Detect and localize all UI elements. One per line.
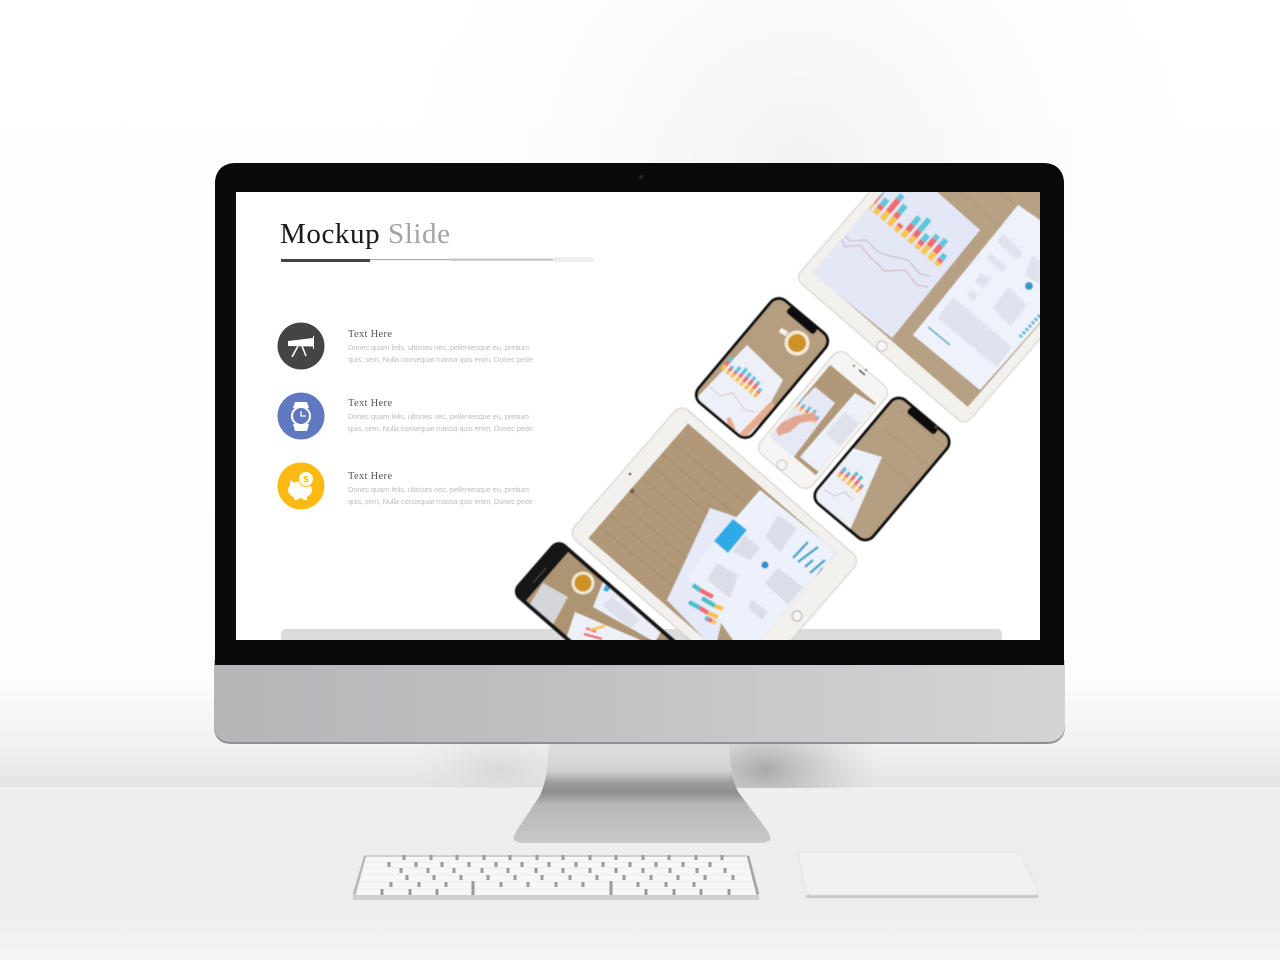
slide title: Mockup Slide [280,218,450,250]
small bars [584,628,602,639]
lower paper [565,612,645,642]
blue header block [714,519,747,553]
desk surface [0,787,1280,960]
item 2 heading: Text Here [348,398,392,409]
cup [784,330,810,356]
slide footer band [281,629,1002,640]
title rule [281,257,594,262]
keyboard row lines [358,862,755,889]
paper [810,448,882,530]
phone: right, black [812,396,952,542]
item 2 body: Donec quam felis, ultricies nec, pellentesque eu, pretium [348,412,529,421]
item 2 body [348,412,533,433]
document text blocks [707,515,803,620]
slide screen [236,192,1040,640]
icon: telescope [278,322,324,370]
trend line [825,490,853,500]
front sheet [720,490,837,640]
monitor chin [214,660,1065,744]
document accents [1025,282,1033,290]
trend line [708,385,755,412]
item 2 [278,392,533,440]
line chart [841,236,930,287]
icon: piggy bank [278,462,324,510]
item 2 body: quis, sem, Nulla consequat massa quis enim, Donec pede [348,424,533,433]
item 1 body [348,343,533,364]
stand shadow on wall [465,744,856,788]
paper with blue header [593,582,662,642]
keyboard [353,855,759,900]
blue bars [793,542,825,577]
phone: top left, black [694,296,830,440]
document text blocks [937,233,1040,367]
monitor stand [514,744,770,844]
item 1 body: quis, sem, Nulla consequat massa quis enim, Donec pede [348,355,533,364]
item 3 body: quis, sem, Nulla consequat massa quis enim, Donec pede [348,497,533,506]
item 3 body: Donec quam felis, ultricies nec, pellentesque eu, pretium [348,485,529,494]
paper [697,344,784,437]
phone: middle, white [758,350,888,490]
grey tablet on desk [529,582,568,625]
monitor bezel [215,163,1064,665]
coffee cup [572,572,594,594]
device collage [514,192,1040,640]
keyboard key gaps [382,855,733,895]
icon: piggy bank: $ [303,474,309,486]
hand [742,406,771,436]
icon: watch [278,392,324,440]
item 1 heading: Text Here [348,329,392,340]
tablet: lower centre [571,407,858,640]
item 1 [278,322,533,370]
tablet: upper right [798,192,1040,423]
stacked bar chart [868,192,948,268]
hand [775,412,817,436]
item 3 heading: Text Here [348,471,392,482]
small bar chart [838,465,867,492]
background soft glow [300,0,1280,610]
chart paper [813,192,980,338]
small bar chart [795,398,821,422]
coloured horizontal bars [689,585,723,623]
blue circle [761,561,769,569]
small bar chart [722,357,765,397]
notch [906,406,939,435]
item 3 [278,462,533,510]
item 3 body [348,485,533,506]
document paper [912,204,1040,390]
webcam [639,175,643,179]
back sheet [666,508,737,640]
trackpad [798,852,1038,898]
notch [785,306,818,335]
phone: bottom left, black landscape [514,541,676,640]
item 1 body: Donec quam felis, ultricies nec, pellentesque eu, pretium [348,343,529,352]
